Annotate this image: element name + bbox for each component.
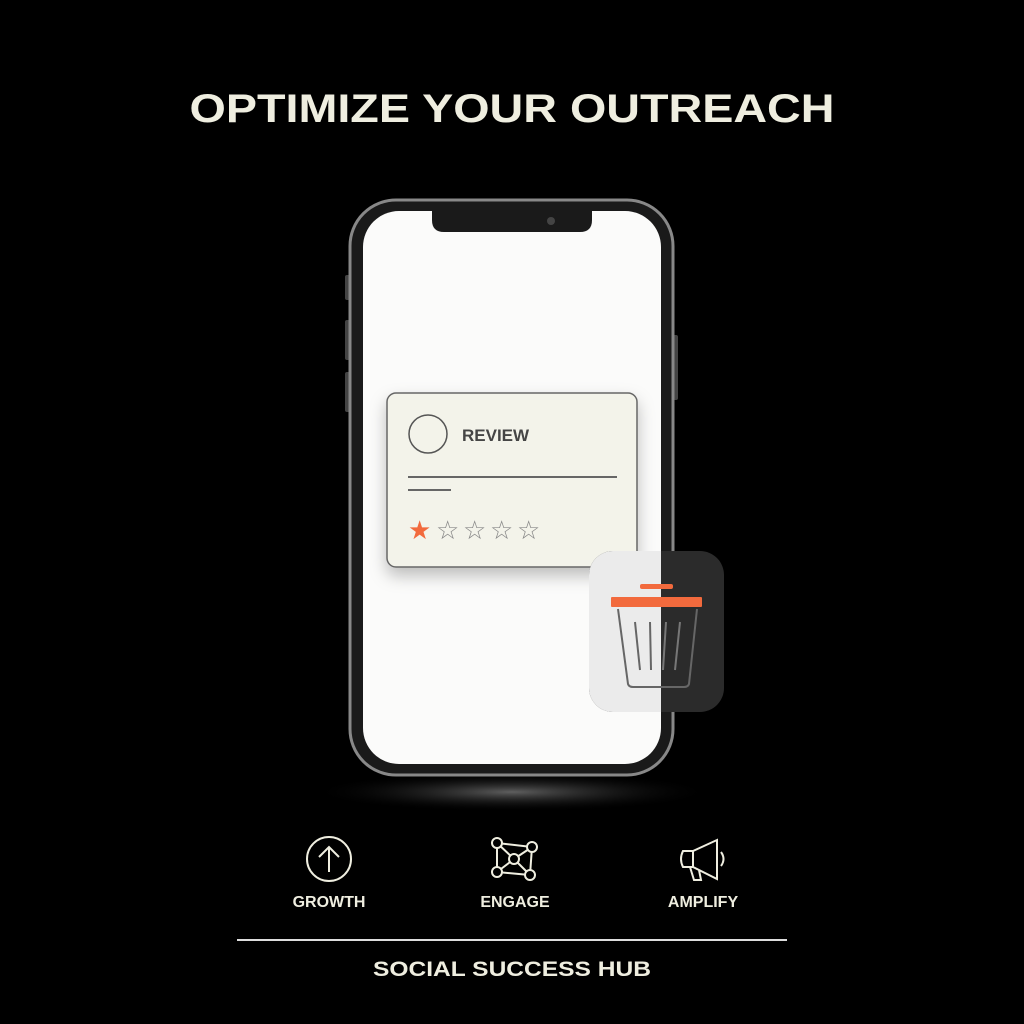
stars: ☆ — [436, 515, 459, 545]
avatar circle — [409, 415, 447, 453]
labels: AMPLIFY — [668, 894, 738, 911]
footer: SOCIAL SUCCESS HUB — [373, 958, 651, 981]
phone glow — [312, 772, 712, 812]
stars — [408, 515, 540, 545]
labels — [293, 894, 738, 911]
stars: ★ — [408, 515, 431, 545]
labels: ENGAGE — [480, 894, 550, 911]
stars: ☆ — [490, 515, 513, 545]
trash tile — [589, 551, 724, 712]
labels: GROWTH — [293, 894, 365, 911]
title: OPTIMIZE YOUR OUTREACH — [190, 87, 834, 131]
notch — [432, 211, 592, 232]
icon: engage — [492, 838, 537, 880]
phone — [345, 200, 678, 775]
stars: ☆ — [517, 515, 540, 545]
stars: ☆ — [463, 515, 486, 545]
icon: growth — [307, 837, 351, 881]
icon: amplify — [681, 840, 724, 880]
review card — [387, 393, 637, 567]
screen — [363, 211, 661, 764]
review label: REVIEW — [462, 426, 530, 445]
